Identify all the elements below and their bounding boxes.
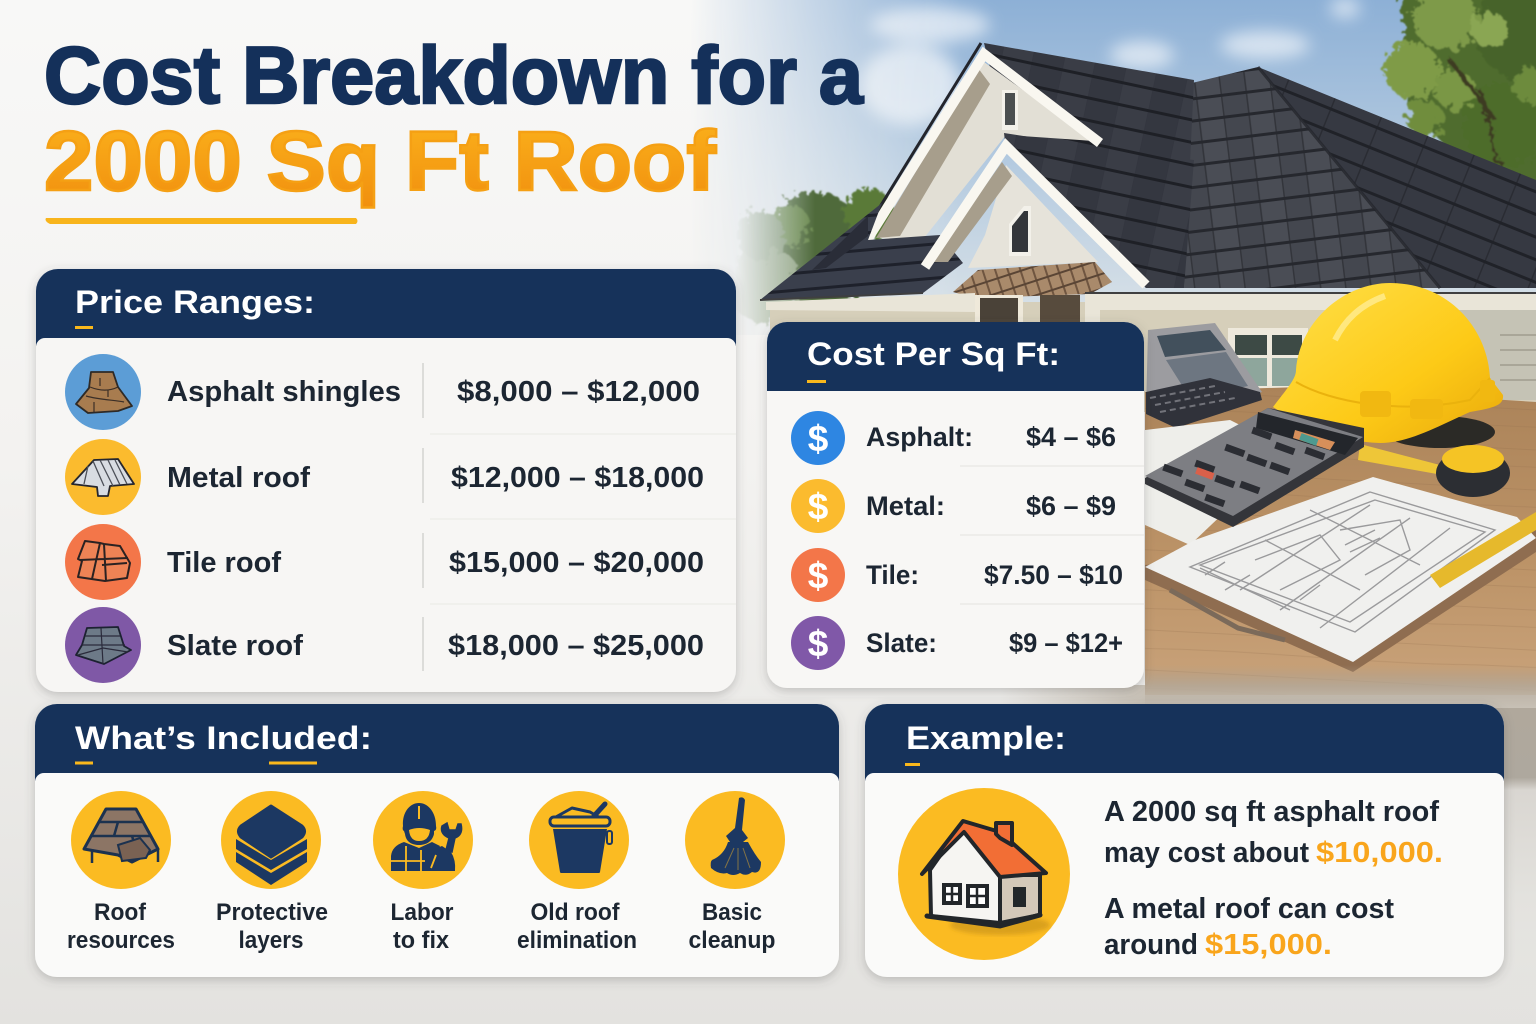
upper gable wall [880, 62, 1094, 243]
row: slate roof [65, 607, 704, 683]
front gable trim [925, 146, 1146, 285]
row: asphalt shingles [65, 354, 700, 430]
item: basic cleanup [685, 791, 785, 954]
panel body top [865, 773, 1504, 833]
row: metal roof: $12,000 – $18,000 [451, 462, 704, 494]
panel body top [35, 773, 839, 833]
back calculator [1146, 323, 1262, 428]
item: basic cleanup: Basic [702, 899, 762, 926]
row: asphalt: Asphalt: [866, 422, 973, 452]
panel: what's included [35, 704, 839, 977]
icon: dollar yellow [791, 479, 845, 533]
icon: tile roof [65, 524, 141, 600]
sky [710, 0, 1536, 302]
header bar [767, 322, 1144, 391]
title line 2: 2000 Sq Ft Roof [44, 114, 717, 208]
row separators [430, 434, 736, 604]
row: asphalt shingles: $8,000 – $12,000 [457, 376, 700, 408]
icon: bucket [529, 791, 629, 889]
blueprint paper [1145, 477, 1536, 662]
measuring tape ruler [1358, 444, 1440, 474]
header bar [36, 269, 736, 346]
row: metal [791, 479, 1116, 533]
wood bottom fade [1145, 665, 1536, 708]
wood grain [1145, 390, 1536, 695]
row: asphalt: $4 – $6 [1026, 422, 1116, 452]
row separators [960, 466, 1144, 604]
text: asphalt example: $10,000. [1316, 837, 1443, 869]
icon: house [898, 788, 1070, 960]
item: roof resources: Roof [94, 899, 147, 926]
icon: stacked layers [221, 791, 321, 889]
right siding lines [1500, 335, 1536, 380]
icon: dollar orange [791, 548, 845, 602]
gutter shadow [760, 293, 1536, 300]
panel: example [865, 704, 1504, 977]
column divider [422, 363, 424, 671]
right siding [1440, 310, 1536, 400]
title line 1: Cost Breakdown for a [44, 31, 864, 121]
icon: broom [685, 791, 785, 889]
brown shingle awning [953, 262, 1112, 298]
header bar [865, 704, 1504, 781]
item: labor [373, 791, 473, 954]
item: roof resources: resources [67, 927, 175, 954]
heading: Example: [906, 720, 1066, 756]
row: asphalt [791, 411, 1116, 465]
second sheet [1145, 420, 1290, 545]
item: labor: to fix [393, 927, 450, 954]
heading accents [75, 762, 317, 764]
item: old roof elimination: Old roof [530, 899, 620, 926]
yellow folding ruler [1430, 512, 1536, 588]
row: tile [791, 548, 1123, 602]
lower windows [975, 295, 1080, 325]
panel: price ranges [36, 269, 736, 692]
title [44, 31, 864, 208]
row: slate: $9 – $12+ [1009, 628, 1123, 658]
row: slate roof: $18,000 – $25,000 [448, 630, 704, 662]
title underline [46, 218, 358, 224]
icon: roof shingles [71, 791, 171, 889]
tree: left [727, 189, 896, 323]
heading accent [905, 763, 920, 766]
icon: dollar purple [791, 616, 845, 670]
heading: What’s Included: [75, 720, 372, 756]
item: old roof elimination: elimination [517, 927, 637, 954]
row: metal: Metal: [866, 491, 945, 521]
icon: asphalt shingles [65, 354, 141, 430]
icon: slate roof [65, 607, 141, 683]
tree: right [1384, 0, 1536, 210]
text: metal example: $15,000. [1205, 929, 1332, 961]
main right roof slope [1258, 67, 1536, 288]
upper gable trim [867, 54, 1100, 240]
hip shadow ridge [1258, 67, 1440, 288]
text: metal example [1104, 893, 1394, 961]
upper gable roof [984, 43, 1194, 288]
row: tile roof: $15,000 – $20,000 [449, 547, 704, 579]
panel body top [36, 338, 736, 398]
row: slate roof: Slate roof [167, 630, 303, 662]
hard hat [1273, 283, 1503, 448]
text: metal example: A metal roof can cost [1104, 893, 1394, 925]
item: protective layers: layers [238, 927, 304, 954]
header bar [35, 704, 839, 781]
tape measure [1436, 445, 1510, 497]
row: metal roof [65, 439, 704, 515]
icon: dollar yellow: $ [808, 486, 829, 527]
clipboard clip [1170, 590, 1285, 640]
heading: Price Ranges: [75, 284, 315, 320]
clipboard [1145, 530, 1536, 672]
blueprint lines [1190, 492, 1495, 632]
gap fade [1000, 685, 1145, 708]
right margin fade [1490, 708, 1536, 1024]
window [1228, 328, 1308, 390]
front gable window [1009, 206, 1031, 256]
row: tile: Tile: [866, 560, 919, 590]
icon: dollar purple: $ [808, 623, 829, 664]
fascia and gutter [766, 292, 1536, 340]
wooden table [1145, 387, 1536, 695]
text: asphalt example [1104, 796, 1443, 869]
row: asphalt shingles: Asphalt shingles [167, 376, 401, 408]
heading accent [75, 326, 93, 329]
text: metal example: around [1104, 929, 1198, 961]
house wall [770, 302, 1536, 412]
icon: dollar blue [791, 411, 845, 465]
row: slate: Slate: [866, 628, 937, 658]
front calculator [1145, 408, 1364, 527]
icon: dollar blue: $ [808, 418, 829, 459]
row: tile roof: Tile roof [167, 547, 281, 579]
icon: worker with wrench [373, 791, 473, 889]
item: protective layers: Protective [216, 899, 328, 926]
front gable soffit [932, 162, 1012, 262]
item: roof resources [67, 791, 175, 954]
icon: dollar orange: $ [808, 555, 829, 596]
upper gable soffit [876, 68, 990, 238]
text: asphalt example: A 2000 sq ft asphalt roof [1104, 796, 1439, 828]
icon: metal roof [65, 439, 141, 515]
main middle roof slope [1184, 67, 1440, 288]
front gable roof [1004, 133, 1194, 288]
front gable wall [968, 165, 1098, 268]
photo: house, roof and desk with tools [710, 0, 1536, 876]
panel: cost per sq ft [767, 322, 1144, 688]
row: metal roof: Metal roof [167, 462, 310, 494]
lower left roof [760, 203, 963, 300]
item: basic cleanup: cleanup [688, 927, 776, 954]
item: protective layers [216, 791, 328, 954]
upper gable window [1002, 90, 1018, 130]
upper gable dark edge [862, 43, 981, 236]
dormer skylight [812, 216, 868, 270]
heading: Cost Per Sq Ft: [807, 336, 1060, 372]
row: tile roof [65, 524, 704, 600]
row: tile: $7.50 – $10 [984, 560, 1123, 590]
row: slate [791, 616, 1123, 670]
row: metal: $6 – $9 [1026, 491, 1116, 521]
text: asphalt example: may cost about [1104, 837, 1309, 869]
item: labor: Labor [390, 899, 454, 926]
heading accent [807, 380, 826, 383]
item: old roof elimination [517, 791, 637, 954]
